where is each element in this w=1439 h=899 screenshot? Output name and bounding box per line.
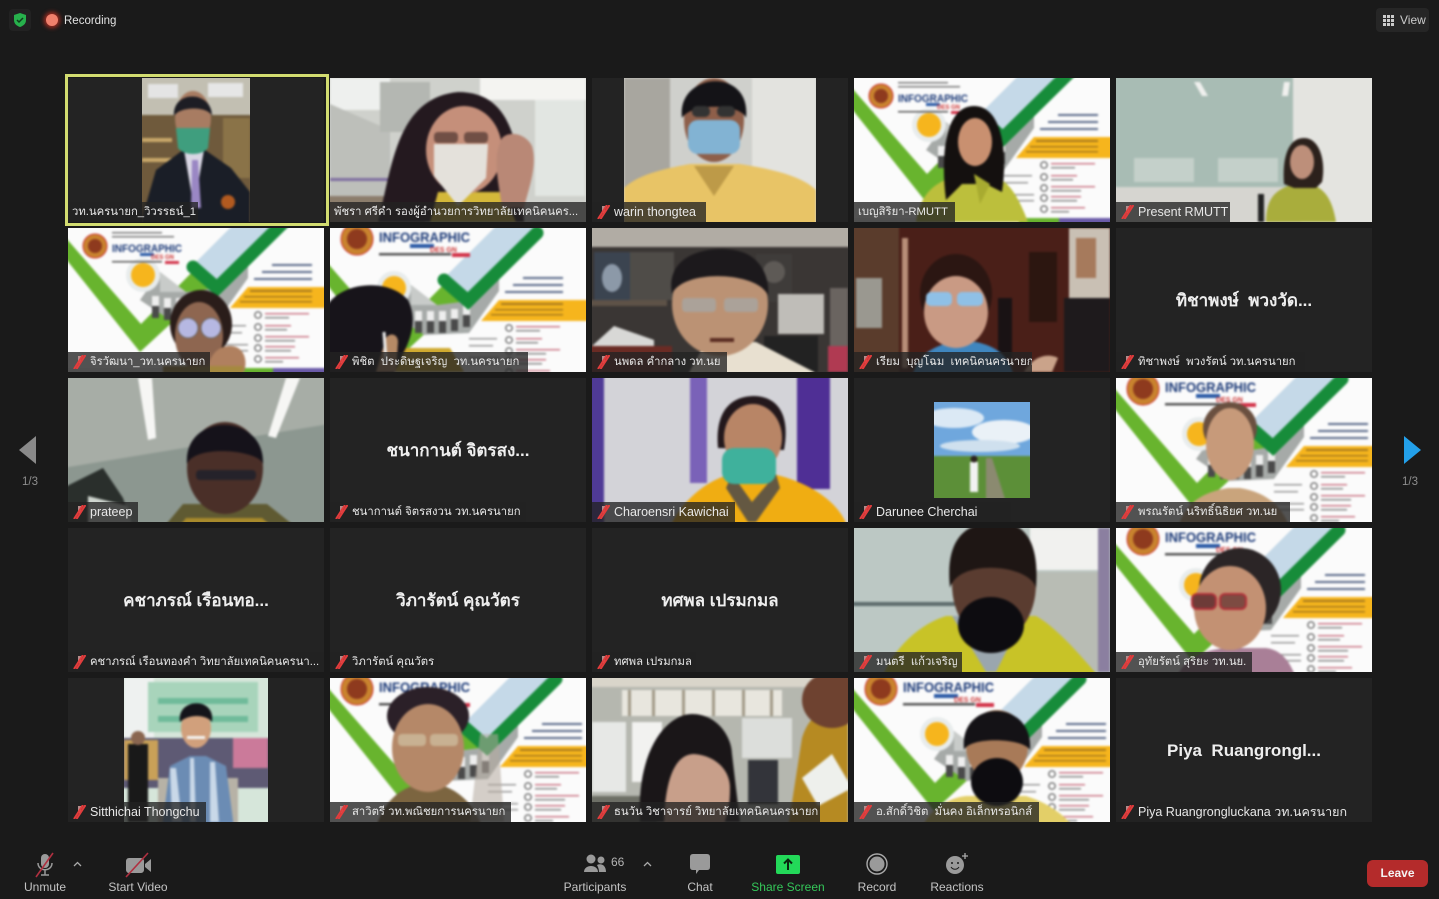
right page arrow: 1/3 — [1402, 476, 1418, 488]
video tile: สาวิตรี: INFOGRAPHIC — [379, 679, 470, 695]
leave button: Leave — [1380, 866, 1415, 880]
name label — [1116, 352, 1305, 372]
toolbar: start video button: Start Video — [108, 880, 168, 894]
active speaker highlight border — [65, 74, 329, 226]
name label — [854, 802, 1039, 822]
view button: View — [1400, 13, 1426, 27]
name label — [68, 352, 210, 372]
name label — [592, 202, 706, 222]
video tile: presenter over poster: INFOGRAPHIC — [898, 93, 968, 105]
name label: Sitthichai Thongchu — [90, 805, 200, 819]
name label: ธนวัน วิชาจารย์ วิทยาลัยเทคนิคนครนายก — [614, 806, 818, 818]
name label — [592, 652, 696, 672]
name label — [330, 352, 528, 372]
name label: เบญสิริยา-RMUTT — [858, 206, 948, 218]
video tile: อ.สักดิ์วิชิต: DES GN — [954, 697, 981, 704]
recording indicator: Recording — [64, 15, 116, 27]
recording indicator — [41, 9, 116, 31]
video tile: พรณรัตน์: INFOGRAPHIC — [1165, 379, 1256, 395]
name label: Present RMUTT — [1138, 205, 1228, 219]
name label: Darunee Cherchai — [876, 505, 977, 519]
video tile: woman with red glasses — [1116, 528, 1372, 672]
display name: ทศพล เปรมกมล — [661, 591, 779, 610]
name label — [330, 502, 526, 522]
name label — [1116, 652, 1252, 672]
name label: มนตรี แก้วเจริญ — [876, 656, 958, 668]
video tile: woman adjusting glasses — [330, 78, 586, 222]
name label: อ.สักดิ์วิชิต มั่นคง อิเล็กทรอนิกส์ — [876, 806, 1032, 818]
name label: พิชิต ประดิษฐเจริญ วท.นครนายก — [352, 356, 519, 368]
name label — [68, 802, 206, 822]
name label: วท.นครนายก_วิวรรธน์_1 — [72, 206, 196, 218]
video tile: man with earphones: INFOGRAPHIC — [379, 229, 470, 245]
video tile: อ.สักดิ์วิชิต — [854, 678, 1110, 822]
video tile: man with black mask — [854, 528, 1110, 672]
name label — [854, 352, 1032, 372]
video tile: สาวิตรี — [330, 678, 586, 822]
toolbar: share screen button: Share Screen — [751, 880, 825, 894]
security shield icon — [14, 13, 26, 27]
toolbar: start video button — [108, 852, 168, 894]
video tile: woman with red glasses: INFOGRAPHIC — [1165, 529, 1256, 545]
name tile: Piya — [1116, 678, 1372, 822]
name label: พรณรัตน์ นริทธิ์นิธิยศ วท.นย — [1138, 506, 1277, 518]
toolbar: record button — [858, 853, 896, 894]
name label — [1116, 802, 1350, 822]
video tile: prateep — [68, 378, 324, 522]
video tile: Charoensri Kawichai — [592, 378, 848, 522]
display name: คชาภรณ์ เรือนทอ... — [123, 591, 269, 610]
video tile: สาวิตรี: DES GN — [430, 697, 457, 704]
view button — [1376, 8, 1429, 32]
video tile: ธนวัน — [592, 678, 848, 822]
name label — [68, 502, 138, 522]
name label: คชาภรณ์ เรือนทองคำ วิทยาลัยเทคนิคนครนา... — [90, 656, 319, 668]
name tile: ทศพล — [592, 528, 848, 672]
video tile: man with earphones — [330, 228, 586, 372]
toolbar: audio caret — [74, 862, 82, 866]
video tile: man with glasses in office — [592, 228, 848, 372]
participant count: 66 — [611, 855, 624, 869]
toolbar: unmute button: Unmute — [24, 880, 66, 894]
left page arrow — [19, 436, 38, 488]
toolbar: share screen button — [751, 855, 825, 894]
video tile: presenter over poster: DES GN — [937, 105, 960, 111]
profile photo tile: Darunee Cherchai — [854, 378, 1110, 522]
toolbar: reactions button: Reactions — [930, 880, 984, 894]
right page arrow — [1402, 436, 1421, 488]
name label: สาวิตรี วท.พณิชยการนครนายก — [352, 806, 505, 818]
name label: prateep — [90, 505, 132, 519]
toolbar: chat button — [687, 854, 713, 894]
video tile: presenter over poster — [854, 78, 1110, 222]
name label — [854, 652, 962, 672]
video tile: host speaker — [68, 78, 324, 222]
leave button — [1367, 860, 1428, 887]
video tile: พรณรัตน์: DES GN — [1216, 397, 1243, 404]
video tile: อ.สักดิ์วิชิต: INFOGRAPHIC — [903, 679, 994, 695]
display name: วิภารัตน์ คุณวัตร — [396, 591, 520, 610]
video tile: warin thongtea — [592, 78, 848, 222]
toolbar: unmute button — [24, 852, 66, 894]
toolbar: participants caret — [644, 862, 652, 866]
name label: วิภารัตน์ คุณวัตร — [352, 656, 434, 668]
display name: ทิชาพงษ์ พวงวัด... — [1176, 291, 1312, 310]
video tile: Present RMUTT — [1116, 78, 1372, 222]
toolbar: participants button: Participants — [564, 880, 626, 894]
name tile: ทิชาพงษ์ — [1116, 228, 1372, 372]
toolbar: participants button — [564, 854, 626, 894]
name label — [330, 802, 511, 822]
toolbar: reactions button — [930, 853, 984, 894]
video tile: woman with hand on cheek — [68, 228, 324, 372]
name label — [68, 202, 198, 222]
display name: Piya Ruangrongl... — [1167, 741, 1321, 760]
video tile: man with earphones: DES GN — [430, 247, 457, 254]
display name: ชนากานต์ จิตรสง... — [387, 441, 529, 460]
video tile: พรณรัตน์ — [1116, 378, 1372, 522]
name label: Piya Ruangrongluckana วท.นครนายก — [1138, 805, 1347, 819]
video tile: woman with wooden cabinet — [854, 228, 1110, 372]
left page arrow: 1/3 — [22, 476, 38, 488]
name label — [1116, 202, 1230, 222]
name label — [330, 202, 586, 222]
name label: นพดล คำกลาง วท.นย — [614, 356, 720, 368]
name label — [1116, 502, 1290, 522]
video tile: woman with red glasses: DES GN — [1216, 547, 1243, 554]
name label: warin thongtea — [614, 205, 696, 219]
name label: Charoensri Kawichai — [614, 505, 729, 519]
name tile: วิภารัตน์ — [330, 528, 586, 672]
name tile: คชาภรณ์ — [68, 528, 324, 672]
name label: จิรวัฒนา_วท.นครนายก — [90, 356, 205, 368]
name label — [330, 652, 438, 672]
toolbar: record button: Record — [858, 880, 896, 894]
video tile: woman with hand on cheek: DES GN — [151, 255, 174, 261]
name label: อุทัยรัตน์ สุริยะ วท.นย. — [1138, 656, 1246, 668]
name label — [592, 352, 727, 372]
name label — [854, 202, 955, 222]
video tile: woman with hand on cheek: INFOGRAPHIC — [112, 243, 182, 255]
name label: พัชรา ศรีคำ รองผู้อำนวยการวิทยาลัยเทคนิคนคร... — [334, 206, 578, 218]
name label — [592, 502, 735, 522]
name label: เรียม บุญโฉม เทคนิคนครนายก — [876, 356, 1032, 368]
name label — [854, 502, 1011, 522]
profile photo tile: Sitthichai Thongchu — [68, 678, 324, 822]
name label: ชนากานต์ จิตรสงวน วท.นครนายก — [352, 506, 521, 518]
name label: ทศพล เปรมกมล — [614, 656, 692, 668]
name label — [68, 652, 324, 672]
name label — [592, 802, 820, 822]
toolbar: chat button: Chat — [687, 880, 713, 894]
name label: ทิชาพงษ์ พวงรัตน์ วท.นครนายก — [1138, 356, 1296, 368]
name tile: ชนากานต์ — [330, 378, 586, 522]
